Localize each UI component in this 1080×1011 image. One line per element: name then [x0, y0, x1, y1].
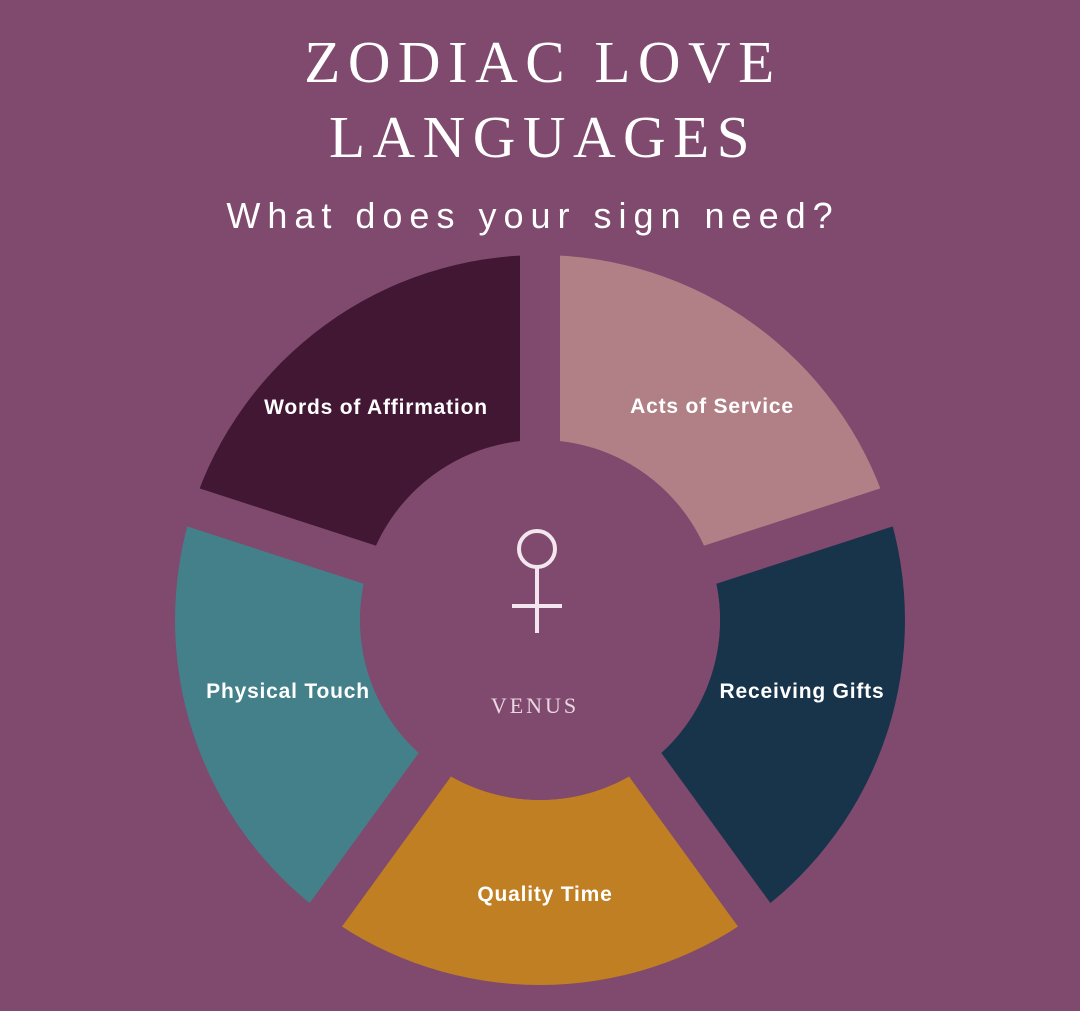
- venus label: VENUS: [491, 693, 579, 718]
- segment labels: Quality Time: [477, 883, 613, 906]
- segment: Words of Affirmation: [193, 255, 540, 564]
- icon: Venus symbol: [512, 531, 562, 633]
- segment: Receiving Gifts: [646, 507, 905, 915]
- segment: Physical Touch: [175, 507, 434, 915]
- donut chart: [163, 230, 917, 985]
- title: [304, 29, 782, 170]
- segment labels: [206, 395, 884, 906]
- segment: Quality Time: [326, 766, 754, 985]
- segment labels: Acts of Service: [630, 395, 794, 418]
- title: LANGUAGES: [329, 104, 757, 170]
- segment: Acts of Service: [540, 255, 887, 564]
- segment labels: Words of Affirmation: [264, 396, 488, 419]
- segment labels: Receiving Gifts: [720, 680, 884, 703]
- subtitle: What does your sign need?: [226, 195, 840, 236]
- title: ZODIAC LOVE: [304, 29, 782, 95]
- segment labels: Physical Touch: [206, 680, 370, 703]
